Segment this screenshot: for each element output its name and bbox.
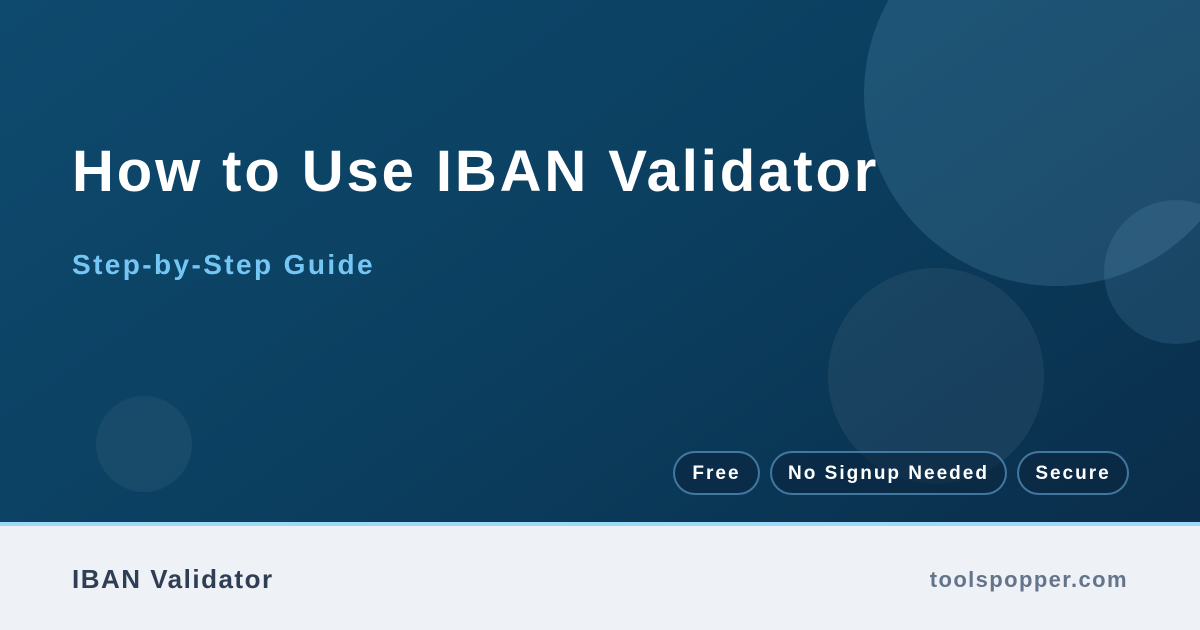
title: How to Use IBAN Validator (72, 139, 879, 204)
decorative circle: lower left (96, 396, 192, 492)
footer domain: toolspopper.com (930, 567, 1128, 592)
badge: Free (673, 451, 760, 495)
decorative circle: lower middle (828, 268, 1044, 484)
badge: Free: Free (692, 463, 741, 484)
badge: No Signup Needed: No Signup Needed (788, 463, 989, 484)
badge: No Signup Needed (770, 451, 1007, 495)
subtitle: Step-by-Step Guide (72, 249, 375, 280)
footer tool name: IBAN Validator (72, 564, 274, 594)
badge: Secure: Secure (1035, 463, 1111, 484)
panel: footer (0, 526, 1200, 630)
accent line (0, 522, 1200, 526)
badge: Secure (1017, 451, 1129, 495)
decorative circle: large top right (864, 0, 1200, 286)
decorative circle: right edge (1104, 200, 1200, 344)
